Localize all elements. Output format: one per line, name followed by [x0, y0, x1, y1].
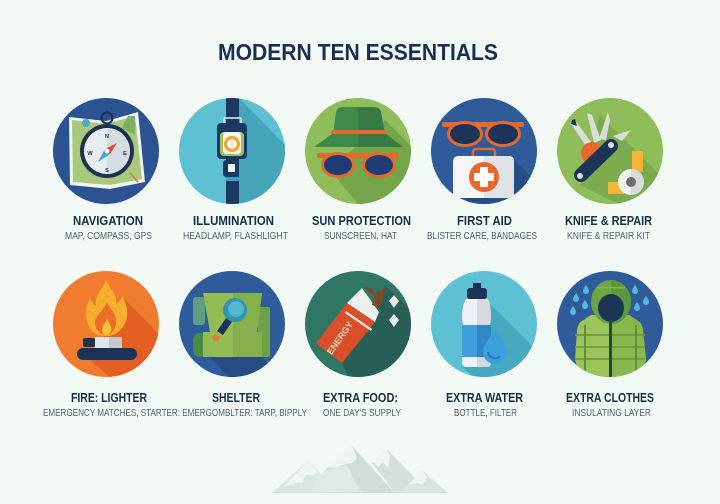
icon: energy bar — [305, 271, 411, 377]
panel: first aid — [427, 98, 545, 242]
heading: fire: FIRE: LIGHTER — [71, 390, 147, 405]
icon: flame on burner — [53, 271, 159, 377]
heading: illumination: ILLUMINATION — [193, 213, 274, 228]
caption: knife and repair: KNIFE & REPAIR KIT — [567, 231, 650, 242]
icon: insulated jacket and rain — [557, 271, 663, 380]
icon: headlamp — [179, 98, 285, 204]
panel: knife and repair — [557, 98, 670, 242]
icon: mountains — [272, 446, 448, 493]
panel: fire — [43, 271, 307, 419]
heading: shelter: SHELTER — [212, 390, 260, 405]
panel: illumination — [179, 98, 290, 242]
caption: first aid: BLISTER CARE, BANDAGES — [427, 231, 537, 242]
caption: extra water: BOTTLE, FILTER — [454, 408, 517, 419]
caption: sun protection: SUNSCREEN, HAT — [324, 231, 397, 242]
panel: extra clothes — [557, 271, 663, 419]
heading: first aid: FIRST AID — [457, 213, 512, 228]
heading: extra clothes: EXTRA CLOTHES — [566, 390, 654, 405]
caption: fire and shelter overlapping: EMERGENCY MATCHES, STARTER: EMERGOMBLTER: TARP, BIPPLY — [43, 408, 307, 419]
icon: map and compass: N — [105, 134, 109, 140]
panel: extra water — [431, 271, 537, 418]
heading: extra food: EXTRA FOOD: — [323, 390, 398, 405]
caption: extra food: ONE DAY'S SUPPLY — [323, 408, 401, 419]
panel: extra food — [305, 271, 411, 416]
panel: shelter — [179, 271, 290, 405]
icon: water bottle and drop — [431, 271, 537, 377]
icon: map and compass — [53, 98, 159, 204]
caption: illumination: HEADLAMP, FLASHLIGHT — [183, 231, 288, 242]
heading: knife and repair: KNIFE & REPAIR — [565, 213, 653, 228]
heading: navigation: NAVIGATION — [73, 213, 143, 228]
icon: hat and sunglasses — [305, 98, 411, 204]
heading: extra water: EXTRA WATER — [446, 390, 523, 405]
caption: extra clothes: INSULATING LAYER — [572, 408, 651, 419]
icon: map and compass: S — [105, 168, 109, 174]
panel: navigation — [53, 98, 159, 242]
icon: map and compass: W — [87, 151, 93, 157]
title: MODERN TEN ESSENTIALS — [218, 39, 498, 65]
heading: sun protection: SUN PROTECTION — [312, 213, 411, 228]
icon: first aid kit — [431, 98, 537, 204]
caption: navigation: MAP, COMPASS, GPS — [65, 231, 152, 242]
icon: energy bar: ENERGY — [325, 320, 355, 356]
icon: map and compass: E — [123, 151, 127, 157]
icon: tarp and flashlight — [179, 271, 285, 377]
icon: multitool and tape — [557, 98, 663, 204]
panel: sun protection — [305, 98, 420, 242]
